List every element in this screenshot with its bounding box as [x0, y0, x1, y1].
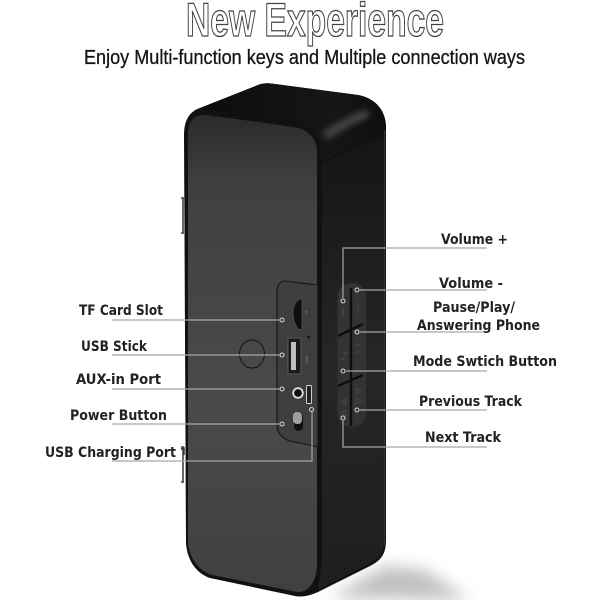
micro usb port [306, 386, 312, 404]
indicator dot [307, 336, 310, 338]
usb tongue [291, 342, 296, 370]
leader: previous track [360, 409, 487, 411]
front circle [240, 340, 264, 368]
tf slot [293, 298, 302, 330]
usb label: USB [304, 355, 309, 364]
top face [200, 83, 386, 163]
leader: TF card slot [112, 319, 279, 321]
dot: volume minus [355, 288, 359, 292]
leader: mode switch [346, 370, 487, 372]
leader: USB charging port [112, 412, 312, 461]
button pill [338, 283, 366, 427]
front face [188, 115, 317, 592]
dot: USB charging port [310, 408, 314, 412]
leader: volume minus [360, 289, 487, 291]
label: volume minus: Volume - [439, 276, 503, 292]
speaker illustration [181, 83, 386, 596]
top highlight [325, 113, 368, 136]
stray tick [181, 448, 184, 455]
dot: previous track [355, 408, 359, 412]
button glyphs [340, 304, 361, 416]
leader: next track [343, 421, 487, 447]
label: USB stick: USB Stick [81, 339, 148, 355]
upper divider [338, 324, 363, 336]
side button left bottom [181, 447, 184, 482]
dot: next track [341, 416, 345, 420]
dot: pause play [355, 330, 359, 334]
usb port [288, 338, 301, 374]
power switch slot [294, 412, 303, 431]
side button left top [181, 198, 184, 233]
right side face [318, 136, 384, 590]
right edge [384, 130, 386, 545]
speaker body silhouette [184, 83, 386, 596]
dot: volume plus [341, 299, 345, 303]
label: mode switch: Mode Swtich Button [413, 354, 557, 370]
power switch knob [293, 412, 302, 424]
panel outline [277, 281, 318, 447]
labels right [413, 232, 557, 446]
label: AUX-in port: AUX-in Port [76, 372, 161, 388]
floor shadow [330, 566, 470, 600]
label: volume plus: Volume + [441, 232, 508, 248]
label: TF card slot: TF Card Slot [79, 303, 163, 319]
dot: AUX-in port [280, 387, 284, 391]
label: next track: Next Track [425, 430, 502, 446]
label: answering phone: Answering Phone [417, 318, 540, 334]
leader: power button [112, 423, 279, 425]
labels left [45, 303, 176, 461]
leader: USB stick [112, 354, 279, 356]
port panel [277, 281, 318, 447]
dot: TF card slot [280, 318, 284, 322]
label: previous track: Previous Track [419, 394, 523, 410]
callout leader lines [112, 248, 487, 461]
callout dots [280, 288, 359, 426]
dot: mode switch [341, 369, 345, 373]
lower divider [338, 375, 363, 386]
label: pause play: Pause/Play/ [433, 300, 516, 316]
label: USB charging port: USB Charging Port [45, 445, 176, 461]
aux jack [293, 388, 303, 398]
button center line [350, 288, 352, 426]
front face rim [185, 111, 320, 595]
dot: power button [280, 422, 284, 426]
leader: AUX-in port [112, 388, 279, 390]
subtitle: Enjoy Multi-function keys and Multiple connection ways [84, 47, 525, 69]
leader: volume plus [343, 248, 487, 298]
tf label: TF [304, 310, 309, 315]
label: power button: Power Button [70, 408, 167, 424]
leader: pause play [360, 331, 487, 333]
dot: USB stick [280, 353, 284, 357]
button strip [338, 283, 366, 427]
